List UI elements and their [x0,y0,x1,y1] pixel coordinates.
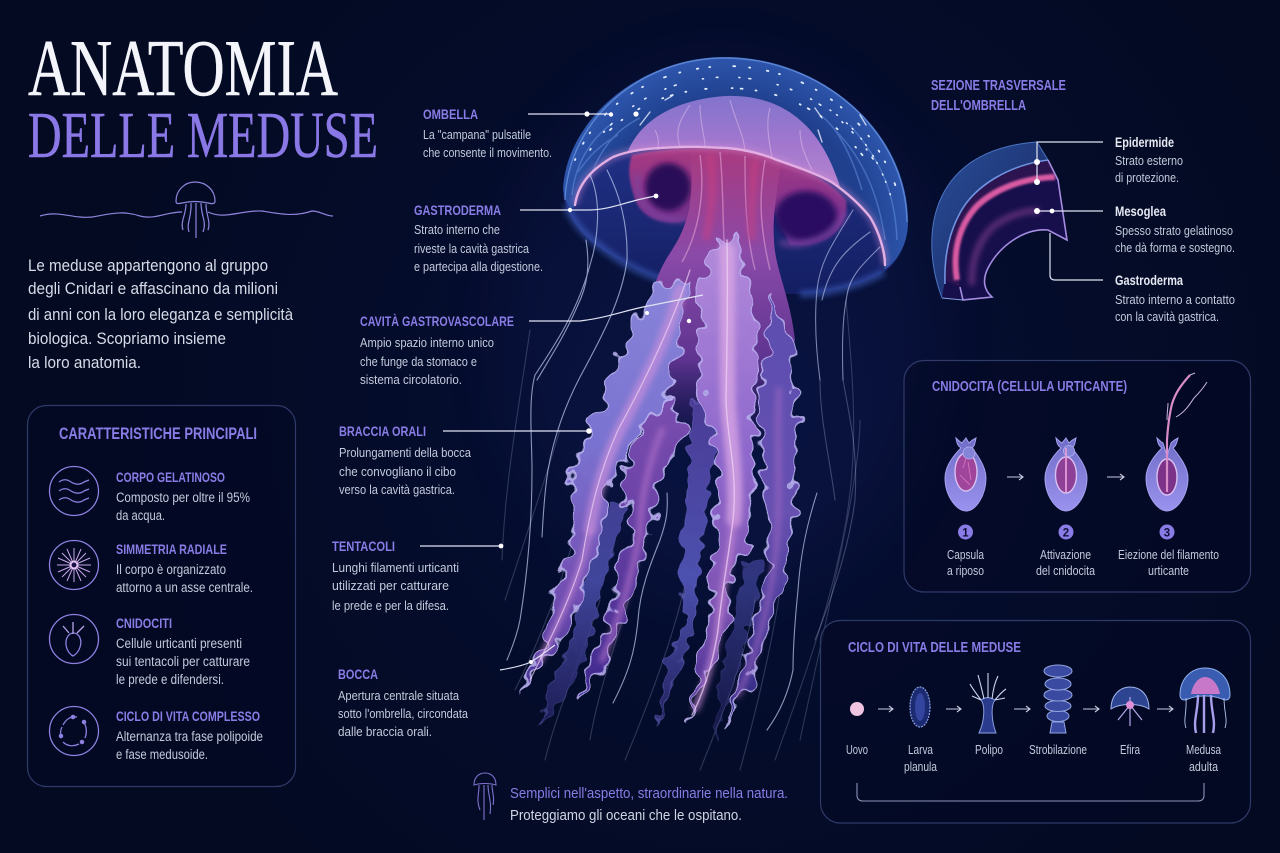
label: mesoglea: Mesoglea [1115,203,1166,219]
callout: braccia orali: Prolungamenti della bocca [339,445,472,460]
icon: title jellyfish with wave [40,182,333,238]
umbrella dome [563,57,908,270]
item: cnidociti: le prede e difendersi. [116,672,224,687]
callout: gastroderma: Strato interno che [414,222,500,237]
item: cnidociti: Cellule urticanti presenti [116,636,242,651]
underside edge glow [566,205,884,294]
heading [931,78,1066,114]
label: epidermide: Epidermide [1115,134,1174,150]
cross-section diagram [932,142,1067,300]
panel: cnidocita [904,360,1250,592]
neck / pillar [650,150,795,450]
title: ANATOMIA [28,25,338,113]
panel: sezione trasversale [931,78,1235,324]
item: corpo gelatinoso [116,469,250,523]
panel heading: CARATTERISTICHE PRINCIPALI [59,425,257,443]
step captions: Attivazione [1040,547,1091,562]
oral arm right [725,295,795,725]
callout: ombella: OMBELLA [423,106,478,122]
callout: cavità gastrovascolare [360,295,703,387]
label: gastroderma: Gastroderma [1115,272,1183,288]
callout: ombella: che consente il movimento. [423,145,552,160]
arrows [878,706,1173,712]
callout: ombella [423,106,639,160]
step captions: a riposo [947,563,984,578]
leader lines [1034,142,1103,280]
oral arms [520,238,795,725]
callout: gastroderma: riveste la cavità gastrica [414,241,530,256]
footer message: Semplici nell'aspetto, straordinarie nella natura. [510,786,788,802]
callout: bocca: BOCCA [338,666,378,682]
item: simmetria radiale: SIMMETRIA RADIALE [116,541,227,557]
rim [575,147,885,265]
front tentacles [507,170,880,730]
callout: cavità gastrovascolare: CAVITÀ GASTROVASCOLARE [360,313,514,329]
label: epidermide: di protezione. [1115,170,1179,185]
icon: radial symmetry [50,540,98,590]
title [28,25,378,172]
item: ciclo di vita: e fase medusoide. [116,747,208,762]
bell underside [563,140,906,294]
callout: tentacoli: TENTACOLI [332,538,395,554]
callout: braccia orali [339,423,592,497]
callout: tentacoli: le prede e per la difesa. [332,598,449,613]
footer message [474,773,788,824]
cell 2 [1045,438,1087,511]
callout: cavità gastrovascolare: che funge da stomaco e [360,354,477,369]
item: simmetria radiale: Il corpo è organizzato [116,562,226,577]
label: epidermide: Strato esterno [1115,153,1183,168]
inner pink dome [628,96,840,187]
intro text: di anni con la loro eleganza e semplicità [28,306,294,324]
intro text: Le meduse appartengono al gruppo [28,257,268,275]
arm pink cores [540,250,779,708]
stage: larva [910,687,930,727]
callout: bocca: dalle braccia orali. [338,724,432,739]
step captions: Capsula [947,547,985,562]
label: gastroderma: con la cavità gastrica. [1115,309,1219,324]
label: epidermide [1115,134,1183,185]
callout: cavità gastrovascolare: sistema circolatorio. [360,372,462,387]
label: mesoglea [1115,203,1235,255]
heading: CICLO DI VITA DELLE MEDUSE [848,640,1021,656]
neck stripes [682,152,770,270]
cavities and stomach [629,148,847,245]
arrow [1007,474,1023,480]
speckles on dome [575,66,897,200]
dark arms behind [540,400,765,740]
icon: waves [50,466,98,516]
stage: egg [850,702,864,716]
cell 1 [945,438,986,511]
stage captions: Medusa [1186,742,1222,757]
heading: CNIDOCITA (CELLULA URTICANTE) [932,379,1127,395]
step captions: urticante [1148,563,1189,578]
back tentacles [502,300,860,770]
stage captions: Strobilazione [1029,742,1087,757]
callout: tentacoli [332,538,503,613]
arm spines [530,240,734,715]
item: ciclo di vita: Alternanza tra fase polipoide [116,729,263,744]
stage: polyp [970,673,1006,733]
item: ciclo di vita: CICLO DI VITA COMPLESSO [116,708,260,724]
intro text: degli Cnidari e affascinano da milioni [28,280,278,298]
item: corpo gelatinoso: Composto per oltre il 95% [116,490,250,505]
cycle bracket [857,783,1204,801]
callout: gastroderma: e partecipa alla digestione. [414,259,543,274]
heading: DELL'OMBRELLA [931,98,1026,114]
jellyfish illustration [500,57,940,770]
callout: braccia orali: verso la cavità gastrica. [339,482,455,497]
icon: small jellyfish [474,773,496,820]
label: mesoglea: che dà forma e sostegno. [1115,240,1235,255]
step captions: Eiezione del filamento [1118,547,1219,562]
step numbers: 3 [1164,528,1170,540]
callout: tentacoli: utilizzati per catturare [332,578,449,593]
callout: bocca [338,645,555,739]
intro text: biologica. Scopriamo insieme [28,330,226,348]
callout: bocca: sotto l'ombrella, circondata [338,706,469,721]
label: gastroderma: Strato interno a contatto [1115,292,1235,307]
panel: ciclo di vita [820,620,1250,823]
intro text: la loro anatomia. [28,354,141,372]
callout: gastroderma: GASTRODERMA [414,202,501,218]
stage captions: adulta [1189,759,1219,774]
callout: tentacoli: Lunghi filamenti urticanti [332,560,459,575]
dome details [565,58,907,240]
icon: life cycle [50,706,98,756]
icon: cnidocyte [50,614,98,664]
glow [500,60,940,600]
stage: strobilation [1044,665,1072,733]
cell 3 [1146,373,1207,511]
stage captions: planula [904,759,938,774]
oral arm left [520,278,688,692]
oral arm center [688,238,757,722]
item: simmetria radiale [116,541,253,595]
title: DELLE MEDUSE [28,99,378,172]
label: gastroderma [1115,272,1235,324]
arrow [1107,474,1124,480]
stage: adult [1180,668,1230,733]
stage captions: Uovo [846,742,868,757]
oral arm second [582,400,688,698]
step numbers: 1 [962,528,969,540]
item: cnidociti [116,615,250,687]
stage captions [846,742,1222,774]
footer message: Proteggiamo gli oceani che le ospitano. [510,808,742,824]
panel: caratteristiche principali [28,406,296,786]
step numbers [958,524,1174,540]
intro text [28,257,294,372]
callout: braccia orali: che convogliano il cibo [339,464,456,479]
item: corpo gelatinoso: CORPO GELATINOSO [116,469,225,485]
item: cnidociti: sui tentacoli per catturare [116,654,250,669]
heading: SEZIONE TRASVERSALE [931,78,1066,94]
label: mesoglea: Spesso strato gelatinoso [1115,223,1233,238]
step captions: del cnidocita [1036,563,1096,578]
step numbers: 2 [1063,528,1069,540]
callout: ombella: La "campana" pulsatile [423,127,531,142]
stage captions: Polipo [975,742,1003,757]
callout: gastroderma [414,194,658,274]
stage: ephyra [1111,687,1149,726]
item: simmetria radiale: attorno a un asse centrale. [116,580,253,595]
step captions [947,547,1219,578]
callout: braccia orali: BRACCIA ORALI [339,423,426,439]
callout: bocca: Apertura centrale situata [338,688,460,703]
item: cnidociti: CNIDOCITI [116,615,172,631]
item: corpo gelatinoso: da acqua. [116,508,165,523]
item: ciclo di vita [116,708,263,762]
stage captions: Efira [1120,742,1141,757]
stage captions: Larva [908,742,934,757]
callout: cavità gastrovascolare: Ampio spazio interno unico [360,335,494,350]
